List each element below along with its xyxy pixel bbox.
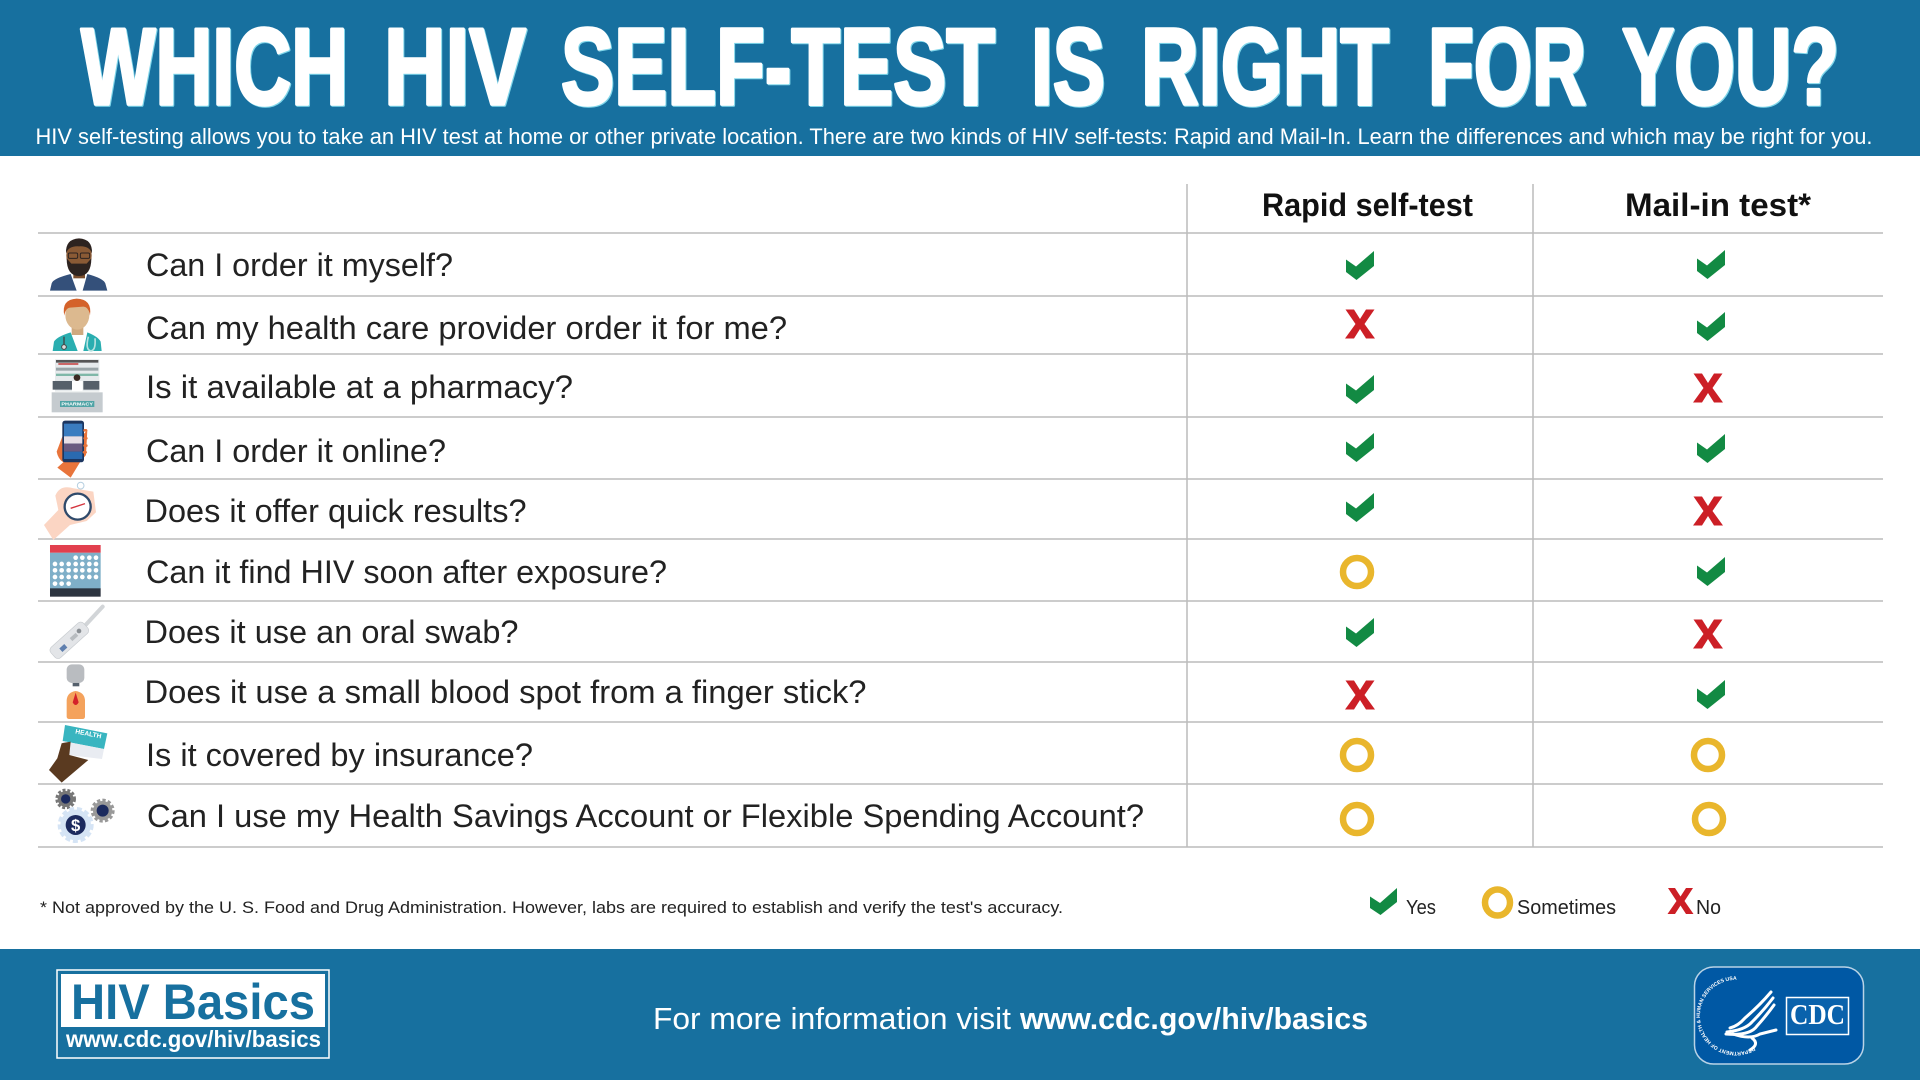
more information text [653,1001,1368,1036]
row 9: insurance [49,725,1722,783]
rapid: no [1345,680,1375,710]
mail-in: no [1693,374,1723,402]
CDC and HHS logo: DEPARTMENT OF HEALTH & HUMAN SERVICES USA [1696,976,1756,1056]
HIV Basics badge: www.cdc.gov/hiv/basics [65,1026,321,1052]
rapid: sometimes [1343,558,1371,586]
row 8: finger stick [67,664,1725,719]
title: FOR [1428,6,1586,128]
icon: hand holding stopwatch [44,482,96,540]
legend [1370,888,1721,919]
title: WHICH [81,6,348,128]
mail-in: sometimes [1694,741,1722,769]
row 2: provider order [53,299,1725,351]
legend: yes: Yes [1406,897,1436,919]
footer banner [0,949,1920,1080]
rapid: no [1345,310,1375,338]
icon: hand with health card [49,725,107,783]
rapid: sometimes [1343,741,1371,769]
mail-in: yes [1697,312,1725,341]
rapid: yes [1346,375,1374,404]
CDC and HHS logo [1694,966,1864,1065]
mail-in: yes [1697,680,1725,709]
header banner [0,0,1920,156]
rapid: yes [1346,493,1374,522]
legend: sometimes [1485,890,1616,919]
title: YOU? [1622,6,1839,128]
legend: no [1668,888,1721,919]
question: Does it offer quick results? [144,493,526,529]
HIV Basics badge [57,970,329,1058]
row 7: oral swab [48,607,1723,660]
title: HIV [384,6,526,128]
mail-in: sometimes [1695,805,1723,833]
row 4: order online [57,421,1725,478]
question: Can I order it myself? [146,247,453,283]
row 3: pharmacy [52,359,1723,412]
row 1: order it myself [50,238,1725,291]
title: IS [1031,6,1105,128]
icon: health care provider [53,299,102,351]
question: Does it use a small blood spot from a finger stick? [144,674,866,710]
mail-in: no [1693,620,1723,648]
more information text: www.cdc.gov/hiv/basics [1019,1001,1368,1036]
question: Is it covered by insurance? [146,737,533,773]
column heading: mail-in test: Mail-in test* [1625,187,1812,223]
footnote: * Not approved by the U. S. Food and Drug Administration. However, labs are required to establish and verify the test's accuracy. [40,898,1063,917]
mail-in: yes [1697,434,1725,463]
table grid lines [38,184,1883,847]
mail-in: yes [1697,250,1725,279]
row 6: soon after exposure [50,545,1725,597]
question: Can I order it online? [146,433,446,469]
icon: lancet and finger [67,664,85,719]
title: RIGHT [1141,6,1389,128]
question: Can it find HIV soon after exposure? [146,554,667,590]
more information text: For more information visit [653,1001,1011,1036]
icon: pharmacy counter [52,359,103,412]
icon: gears with dollar sign [58,791,112,840]
icon: gears with dollar sign: $ [71,816,81,835]
rapid: yes [1346,618,1374,647]
rapid: yes [1346,433,1374,462]
question: Does it use an oral swab? [144,614,518,650]
legend: no: No [1696,897,1721,919]
mail-in: no [1693,496,1723,526]
question: Can my health care provider order it for me? [146,310,787,346]
icon: man with beard [50,238,107,291]
legend: sometimes: Sometimes [1517,897,1616,919]
title [81,6,1839,128]
HIV Basics badge: HIV Basics [71,974,315,1030]
CDC and HHS logo: CDC [1790,1000,1845,1031]
icon: pharmacy counter: PHARMACY [61,402,94,407]
rapid: yes [1346,251,1374,280]
subtitle: HIV self-testing allows you to take an HIV test at home or other private location. There are two kinds of HIV self-tests: Rapid and Mail-In. Learn the differences and which may be right for you. [36,124,1872,149]
question: Can I use my Health Savings Account or Flexible Spending Account? [147,798,1144,834]
icon: hand with health card: HEALTH [75,728,102,740]
icon: calendar [50,545,101,597]
row 5: quick results [44,482,1723,540]
question: Is it available at a pharmacy? [146,369,573,405]
title: SELF-TEST [561,6,995,128]
icon: oral swab test [48,607,103,660]
mail-in: yes [1697,557,1725,586]
rapid: sometimes [1343,805,1371,833]
icon: hand holding phone [57,421,88,478]
column heading: rapid self-test: Rapid self-test [1262,187,1473,223]
row 10: HSA or FSA [58,791,1723,840]
legend: yes [1370,888,1436,919]
